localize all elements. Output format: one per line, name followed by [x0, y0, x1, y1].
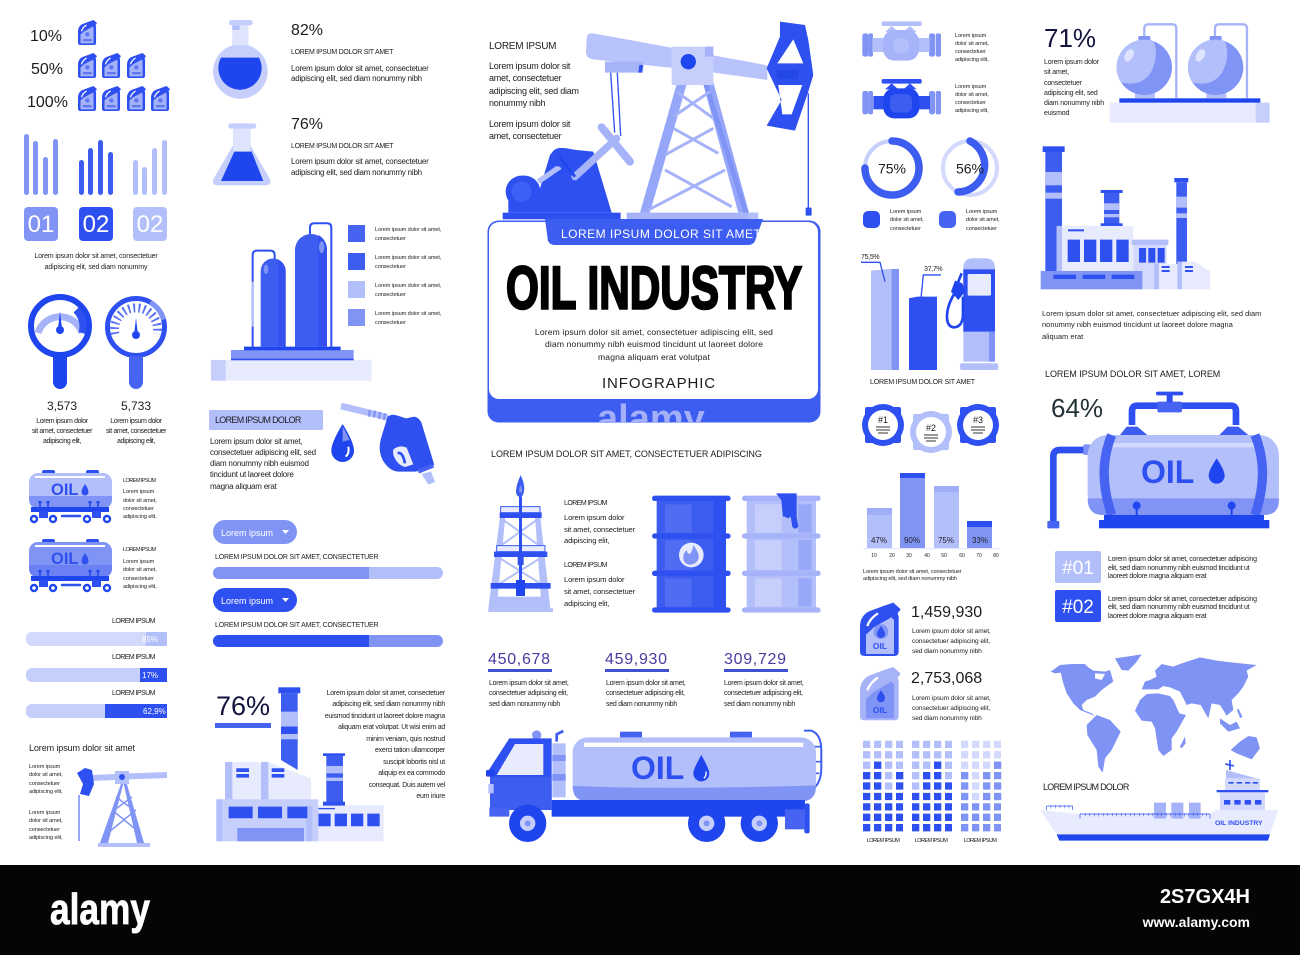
- spherical tanks 71%: euismod: [1044, 110, 1069, 117]
- three stats: consectetuer adipiscing elit,: [489, 690, 568, 697]
- text block with band: magna aliquam erat: [210, 482, 278, 491]
- column chart: 60: [959, 553, 965, 559]
- factory with 76%: aliquam erat volutpat. Ut wisi enim ad: [338, 724, 445, 731]
- spherical tanks 71%: 71%: [1044, 23, 1096, 53]
- footer: alamy bar: www.alamy.com: [1142, 914, 1250, 930]
- text block with band: [209, 410, 323, 491]
- gauges: sit amet, consectetuer: [106, 428, 167, 435]
- valves with text: adipiscing elit,: [955, 108, 989, 114]
- pictogram percentages: oil cans: 10%: [30, 28, 62, 45]
- numbered notes: #02: [1062, 597, 1094, 618]
- valves with text: [862, 21, 989, 118]
- progress bars: LOREM IPSUM: [112, 654, 156, 661]
- oil can stat 1: sed diam nonummy nibh: [912, 648, 982, 655]
- round flask 82%: adipiscing elit, sed diam nonummy nibh: [291, 74, 422, 83]
- factory top right: aliquam erat: [1042, 332, 1083, 341]
- oil tanker truck: [486, 730, 822, 842]
- valves with text: Lorem ipsum: [955, 84, 987, 90]
- rig text: sit amet, consectetuer: [564, 525, 636, 534]
- numbered badges: #2: [926, 423, 936, 433]
- donut charts: consectetuer: [966, 226, 997, 232]
- oil tanker ship: OIL INDUSTRY: [1215, 820, 1263, 827]
- rail tank car 2: dolor sit amet,: [123, 567, 157, 573]
- rig text: Lorem ipsum dolor: [564, 575, 625, 584]
- dropdown progress 2: [213, 588, 443, 647]
- oil can stat 2: OIL: [873, 705, 887, 715]
- dropdown progress 1: Lorem ipsum: [221, 528, 273, 538]
- spherical tanks 71%: diam nonummy nibh: [1044, 100, 1104, 107]
- three stats: sed diam nonummy nibh: [724, 701, 795, 708]
- oil can stat 1: [860, 603, 991, 656]
- column legend: [348, 225, 442, 326]
- gauges: sit amet, consectetuer: [32, 428, 93, 435]
- title panel: LOREM IPSUM DOLOR SIT AMET: [561, 227, 761, 241]
- rail tank car 1: dolor sit amet,: [123, 498, 157, 504]
- small pumpjack with text: dolor sit amet,: [29, 818, 63, 824]
- column legend: consectetuer: [375, 236, 406, 242]
- rig text: LOREM IPSUM: [564, 562, 608, 569]
- rail tank car 1: Lorem ipsum: [123, 489, 155, 495]
- dropdown progress 2: Lorem ipsum: [221, 596, 273, 606]
- donut charts: Lorem ipsum: [966, 209, 998, 215]
- section heading: LOREM IPSUM DOLOR SIT AMET, CONSECTETUER ADIPISCING: [491, 449, 762, 459]
- spherical tanks 71%: [1044, 23, 1270, 123]
- gauges: Lorem ipsum dolor: [36, 418, 89, 425]
- oil storage tank 64%: 64%: [1051, 393, 1103, 423]
- oil storage tank 64%: LOREM IPSUM DOLOR SIT AMET, LOREM: [1045, 369, 1220, 379]
- valves with text: consectetuer: [955, 100, 986, 106]
- column legend: Lorem ipsum dolor sit amet,: [375, 255, 442, 261]
- conical flask 76%: LOREM IPSUM DOLOR SIT AMET: [291, 143, 394, 150]
- oil tanker ship: LOREM IPSUM DOLOR: [1043, 782, 1130, 792]
- bars with fuel pump: 37,7%: [924, 266, 942, 273]
- watermark: alamy: [597, 398, 705, 440]
- donut charts: dolor sit amet,: [966, 217, 1000, 223]
- column chart: 40: [924, 553, 930, 559]
- numbered notes: laoreet dolore magna aliquam erat: [1108, 613, 1207, 620]
- rig text: adipiscing elit,: [564, 599, 609, 608]
- numbered notes: [1055, 551, 1257, 622]
- small pumpjack with text: [29, 743, 167, 847]
- central heading text: [489, 41, 579, 141]
- progress bars: 85%: [142, 635, 158, 644]
- rail tank car 2: LOREM IPSUM: [123, 547, 157, 553]
- title panel: INFOGRAPHIC: [602, 375, 716, 392]
- small pumpjack with text: consectetuer: [29, 781, 60, 787]
- three stats: Lorem ipsum dolor sit amet,: [606, 680, 686, 687]
- bars with fuel pump: 75,5%: [861, 254, 879, 261]
- spherical tanks 71%: Lorem ipsum dolor: [1044, 59, 1100, 66]
- rail tank car 2: adipiscing elit,: [123, 584, 157, 590]
- gauges: Lorem ipsum dolor: [110, 418, 163, 425]
- spherical tanks 71%: adipiscing elit, sed: [1044, 90, 1098, 97]
- rail tank car 2: [29, 539, 157, 591]
- central heading text: amet, consectetuer: [489, 73, 562, 83]
- three stats: 459,930: [605, 651, 668, 668]
- column chart: adipiscing elit, sed diam nonummy nibh: [863, 576, 957, 582]
- donut charts: [863, 141, 1000, 232]
- small pumpjack with text: Lorem ipsum dolor sit amet: [29, 743, 136, 753]
- progress bars: 17%: [142, 671, 158, 680]
- column legend: Lorem ipsum dolor sit amet,: [375, 283, 442, 289]
- spherical tanks 71%: consectetuer: [1044, 80, 1083, 87]
- central heading text: LOREM IPSUM: [489, 41, 556, 52]
- factory with 76%: eum iriure: [416, 793, 445, 800]
- text block with band: consectetuer adipiscing elit, sed: [210, 448, 316, 457]
- round flask 82%: Lorem ipsum dolor sit amet, consectetuer: [291, 64, 429, 73]
- donut charts: Lorem ipsum: [890, 209, 922, 215]
- conical flask 76%: adipiscing elit, sed diam nonummy nibh: [291, 168, 422, 177]
- oil can stat 2: [860, 667, 991, 722]
- rig text: [564, 500, 636, 608]
- oil can stat 2: Lorem ipsum dolor sit amet,: [912, 695, 991, 702]
- donut charts: dolor sit amet,: [890, 217, 924, 223]
- oil can stat 1: consectetuer adipiscing elit,: [912, 638, 990, 645]
- rig text: sit amet, consectetuer: [564, 587, 636, 596]
- central heading text: nonummy nibh: [489, 98, 545, 108]
- donut charts: 56%: [956, 160, 984, 176]
- dropdown progress 1: LOREM IPSUM DOLOR SIT AMET, CONSECTETUER: [215, 554, 379, 561]
- conical flask 76%: [213, 116, 429, 185]
- numbered badges: #1: [878, 415, 888, 425]
- bars with fuel pump: LOREM IPSUM DOLOR SIT AMET: [870, 379, 976, 386]
- pictogram percentages: oil cans: [27, 20, 170, 111]
- central heading text: amet, consectetuer: [489, 131, 562, 141]
- column legend: consectetuer: [375, 264, 406, 270]
- factory with 76%: consequat. Duis autem vel: [369, 782, 446, 789]
- rail tank car 1: adipiscing elit,: [123, 514, 157, 520]
- three stats: consectetuer adipiscing elit,: [724, 690, 803, 697]
- rail tank car 2: consectetuer: [123, 576, 154, 582]
- title panel: [488, 219, 820, 440]
- title panel: diam nonummy nibh euismod tincidunt ut laoreet dolore: [545, 339, 763, 349]
- donut charts: 75%: [878, 160, 906, 176]
- matrix labels: LOREM IPSUM: [915, 838, 948, 844]
- footer: alamy bar: [0, 865, 1300, 955]
- small pumpjack with text: adipiscing elit,: [29, 789, 63, 795]
- oil rig: [488, 475, 553, 612]
- column legend: Lorem ipsum dolor sit amet,: [375, 311, 442, 317]
- numbered notes: elit, sed diam nonummy nibh euismod tincidunt ut: [1108, 604, 1250, 611]
- round flask 82%: LOREM IPSUM DOLOR SIT AMET: [291, 49, 394, 56]
- valves with text: adipiscing elit,: [955, 57, 989, 63]
- large pumpjack: [503, 22, 813, 219]
- column chart: 47%: [871, 536, 887, 545]
- oil tanker truck: OIL: [631, 750, 684, 786]
- bar sets 01 02 02: 02: [83, 211, 109, 238]
- column legend: consectetuer: [375, 320, 406, 326]
- footer: alamy bar: 2S7GX4H: [1160, 886, 1250, 908]
- factory with 76%: exerci tation ullamcorper: [375, 747, 446, 754]
- column chart: 20: [889, 553, 895, 559]
- rig text: LOREM IPSUM: [564, 500, 608, 507]
- matrix labels: LOREM IPSUM: [964, 838, 997, 844]
- bar sets 01 02 02: adipiscing elit, sed diam nonummy: [45, 264, 148, 271]
- rig text: adipiscing elit,: [564, 536, 609, 545]
- factory top right: [1041, 146, 1261, 341]
- factory with 76%: euismod tincidunt ut laoreet dolore magna: [325, 713, 445, 720]
- small pumpjack with text: consectetuer: [29, 827, 60, 833]
- gauges: 5,733: [121, 399, 151, 413]
- title panel: Lorem ipsum dolor sit amet, consectetuer adipiscing elit, sed: [535, 327, 773, 337]
- factory with 76%: minim veniam, quis nostrud: [366, 736, 445, 743]
- factory with 76%: [215, 687, 446, 841]
- valves with text: Lorem ipsum: [955, 33, 987, 39]
- pictogram percentages: oil cans: 100%: [27, 94, 68, 111]
- numbered notes: laoreet dolore magna aliquam erat: [1108, 573, 1207, 580]
- numbered badges: [862, 404, 999, 453]
- progress bars: LOREM IPSUM: [112, 690, 156, 697]
- waffle matrix charts: [863, 744, 1001, 828]
- numbered notes: #01: [1062, 558, 1094, 579]
- column chart: 10: [871, 553, 877, 559]
- text block with band: Lorem ipsum dolor sit amet,: [210, 437, 303, 446]
- gauges: adipiscing elit,: [43, 438, 81, 445]
- oil can stat 1: OIL: [873, 641, 887, 651]
- gauges: [31, 297, 167, 445]
- round flask 82%: 82%: [291, 22, 323, 39]
- conical flask 76%: Lorem ipsum dolor sit amet, consectetuer: [291, 157, 429, 166]
- factory with 76%: suscipit lobortis nisl ut: [383, 759, 445, 766]
- column chart: 80: [993, 553, 999, 559]
- column chart: 75%: [938, 536, 954, 545]
- ribbon: [545, 219, 763, 245]
- valves with text: dolor sit amet,: [955, 92, 989, 98]
- distillation columns: [211, 223, 372, 381]
- column chart: 70: [976, 553, 982, 559]
- numbered notes: Lorem ipsum dolor sit amet, consectetuer adipiscing: [1108, 556, 1257, 563]
- oil can stat 1: Lorem ipsum dolor sit amet,: [912, 628, 991, 635]
- central heading text: Lorem ipsum dolor sit: [489, 119, 571, 129]
- rail tank car 1: consectetuer: [123, 506, 154, 512]
- three stats: Lorem ipsum dolor sit amet,: [724, 680, 804, 687]
- factory with 76%: adipiscing elit, sed diam nonummy nibh: [332, 701, 445, 708]
- oil can stat 2: 2,753,068: [911, 670, 982, 687]
- three stats: 450,678: [488, 651, 551, 668]
- spherical tanks 71%: sit amet,: [1044, 69, 1069, 76]
- rail tank car 1: OIL: [51, 481, 78, 499]
- donut charts: consectetuer: [890, 226, 921, 232]
- column legend: consectetuer: [375, 292, 406, 298]
- pictogram percentages: oil cans: 50%: [31, 61, 63, 78]
- icon: fuel nozzle and drop: [331, 406, 435, 485]
- factory top right: Lorem ipsum dolor sit amet, consectetuer adipiscing elit, sed diam: [1042, 309, 1261, 318]
- valves with text: consectetuer: [955, 49, 986, 55]
- rail tank car 2: Lorem ipsum: [123, 559, 155, 565]
- rail tank car 1: [29, 470, 157, 522]
- progress bars: 62,9%: [143, 707, 166, 716]
- column legend: Lorem ipsum dolor sit amet,: [375, 227, 442, 233]
- three stats: 309,729: [724, 651, 787, 668]
- numbered notes: elit, sed diam nonummy nibh euismod tincidunt ut: [1108, 565, 1250, 572]
- factory with 76%: Lorem ipsum dolor sit amet, consectetuer: [327, 690, 446, 697]
- bar sets 01 02 02: [24, 134, 167, 271]
- rail tank car 1: LOREM IPSUM: [123, 478, 157, 484]
- oil storage tank 64%: [1045, 369, 1279, 528]
- text block with band: tincidunt ut laoreet dolore: [210, 470, 294, 479]
- numbered notes: Lorem ipsum dolor sit amet, consectetuer adipiscing: [1108, 596, 1257, 603]
- dropdown progress 1: [213, 520, 443, 579]
- barrel light: [742, 493, 821, 613]
- oil storage tank 64%: OIL: [1141, 454, 1194, 490]
- small pumpjack with text: adipiscing elit,: [29, 835, 63, 841]
- column chart: 50: [941, 553, 947, 559]
- column chart: 30: [906, 553, 912, 559]
- gauges: 3,573: [47, 399, 77, 413]
- matrix labels: [867, 838, 997, 844]
- small pumpjack with text: Lorem ipsum: [29, 810, 61, 816]
- column chart: [863, 473, 1000, 582]
- valves with text: dolor sit amet,: [955, 41, 989, 47]
- bar sets 01 02 02: 01: [28, 211, 54, 238]
- oil can stat 2: consectetuer adipiscing elit,: [912, 705, 990, 712]
- oil can stat 2: sed diam nonummy nibh: [912, 715, 982, 722]
- factory with 76%: 76%: [216, 691, 270, 721]
- rig text: Lorem ipsum dolor: [564, 513, 625, 522]
- bar sets 01 02 02: 02: [137, 211, 163, 238]
- matrix labels: LOREM IPSUM: [867, 838, 900, 844]
- text block with band: diam nonummy nibh euismod: [210, 459, 309, 468]
- oil can stat 1: 1,459,930: [911, 604, 982, 621]
- round flask 82%: [213, 20, 429, 99]
- barrel dark: [652, 496, 731, 613]
- title panel: magna aliquam erat volutpat: [598, 352, 710, 362]
- central heading text: adipiscing elit, sed diam: [489, 86, 579, 96]
- progress bars: LOREM IPSUM: [112, 618, 156, 625]
- column chart: 33%: [972, 536, 988, 545]
- three stats: sed diam nonummy nibh: [606, 701, 677, 708]
- footer: alamy bar: alamy: [50, 885, 150, 934]
- conical flask 76%: 76%: [291, 116, 323, 133]
- main title: OIL INDUSTRY: [506, 254, 802, 322]
- bar sets 01 02 02: Lorem ipsum dolor sit amet, consectetuer: [34, 253, 158, 260]
- oil tanker ship: [1040, 760, 1278, 841]
- small pumpjack with text: dolor sit amet,: [29, 772, 63, 778]
- text block with band: LOREM IPSUM DOLOR: [215, 415, 302, 425]
- progress bars: [26, 618, 167, 718]
- world map: [1051, 654, 1260, 773]
- three stats: sed diam nonummy nibh: [489, 701, 560, 708]
- small pumpjack with text: Lorem ipsum: [29, 764, 61, 770]
- factory with 76%: aliquip ex ea commodo: [378, 770, 445, 777]
- central heading text: Lorem ipsum dolor sit: [489, 61, 571, 71]
- dropdown progress 2: LOREM IPSUM DOLOR SIT AMET, CONSECTETUER: [215, 622, 379, 629]
- numbered badges: #3: [973, 415, 983, 425]
- three stats: [488, 651, 804, 708]
- gauges: adipiscing elit,: [117, 438, 155, 445]
- three stats: Lorem ipsum dolor sit amet,: [489, 680, 569, 687]
- bars with fuel pump: [861, 254, 998, 386]
- factory top right: nonummy nibh euismod tincidunt ut laoreet dolore magna: [1042, 320, 1234, 329]
- column chart: Lorem ipsum dolor sit amet, consectetuer: [863, 569, 962, 575]
- three stats: consectetuer adipiscing elit,: [606, 690, 685, 697]
- rail tank car 2: OIL: [51, 550, 78, 568]
- column chart: 90%: [904, 536, 920, 545]
